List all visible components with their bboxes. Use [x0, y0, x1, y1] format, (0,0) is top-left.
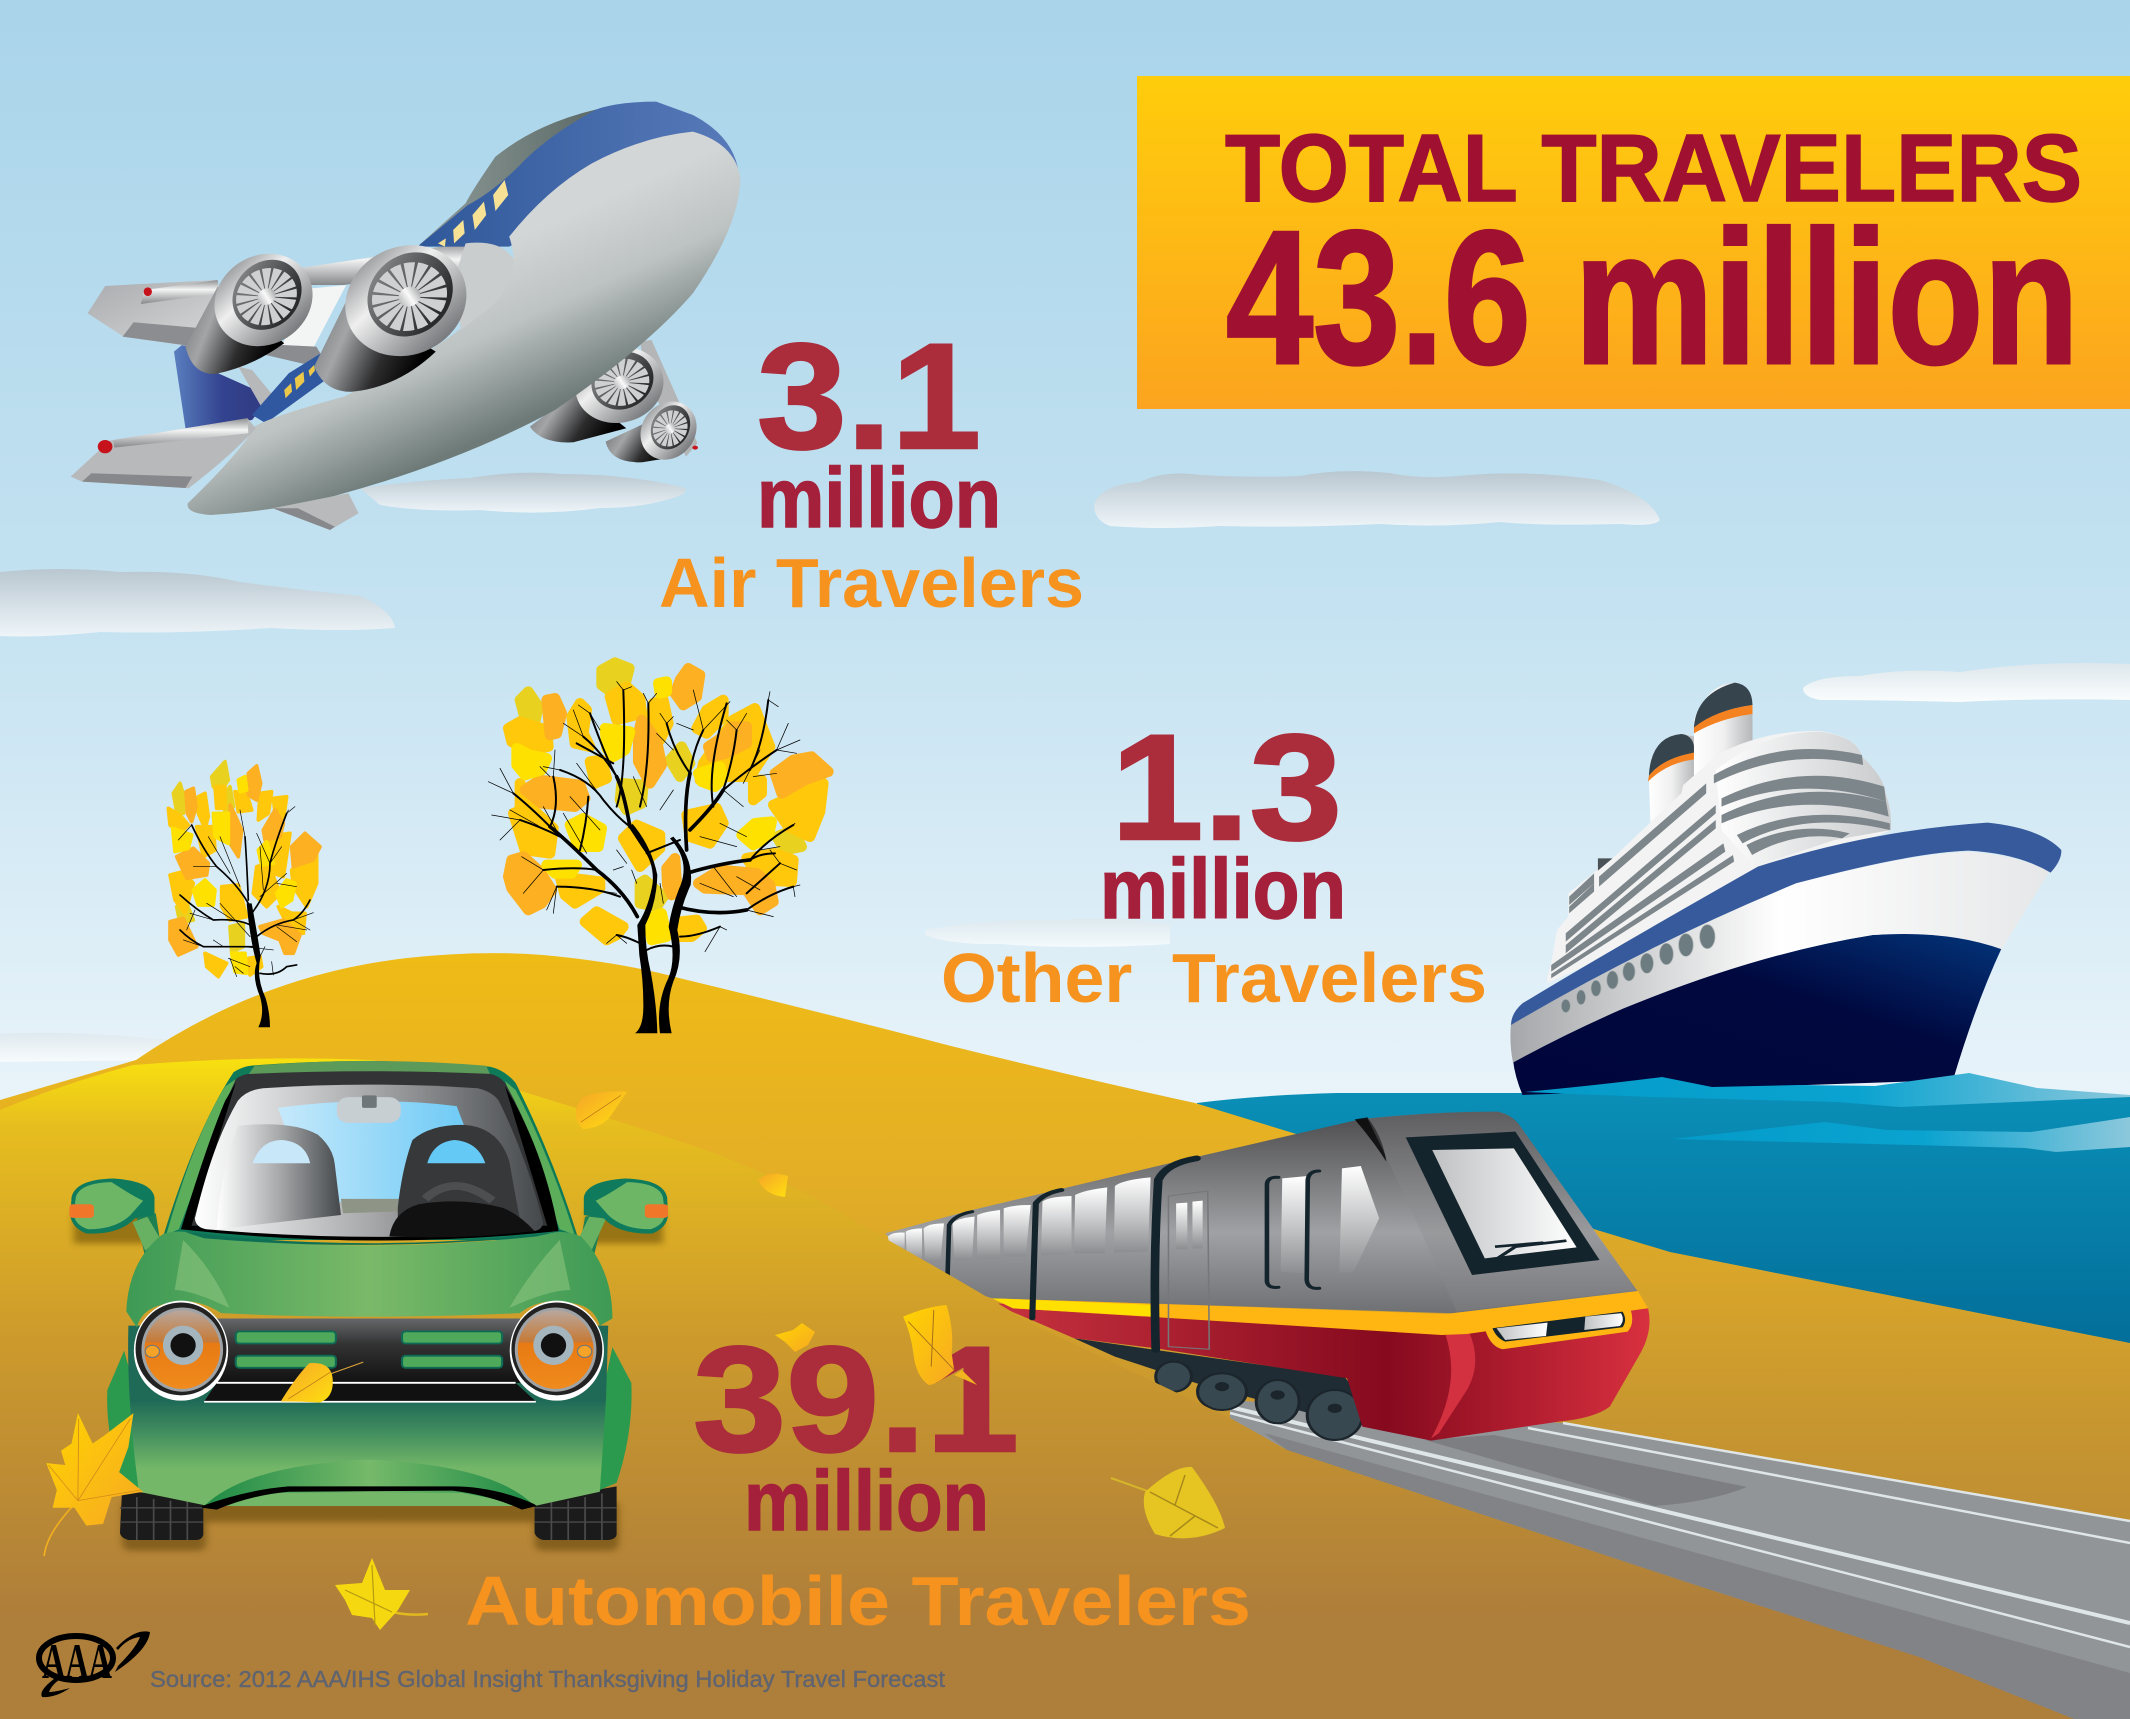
hull — [1513, 934, 2002, 1095]
water surface waves — [1525, 1073, 2130, 1152]
number: air travelers 3.1 million: million — [757, 451, 1001, 545]
trunk and branches — [247, 903, 270, 1027]
far wing and engines — [530, 340, 703, 463]
leaves — [44, 1091, 1225, 1630]
number: automobile travelers 39.1 million: million — [744, 1454, 989, 1548]
icon: train — [885, 1112, 1650, 1441]
mirrors — [69, 1179, 668, 1258]
yellow stripe — [992, 1291, 1648, 1335]
number: automobile travelers 39.1 million: 39.1 — [693, 1315, 1019, 1483]
label: air travelers: Air Travelers — [659, 544, 1084, 622]
foliage — [508, 663, 828, 940]
tyres — [120, 1486, 617, 1540]
under chassis and wheels — [1074, 1338, 1362, 1440]
upper wing — [88, 243, 468, 370]
red lower body — [992, 1303, 1650, 1441]
seats — [217, 1124, 341, 1229]
logo: AAA: AAA — [42, 1633, 112, 1689]
blue rail — [1511, 823, 2061, 1025]
number: air travelers 3.1 million — [659, 312, 1084, 622]
railway track — [1230, 1400, 2130, 1719]
panel: total travelers banner — [1137, 76, 2130, 409]
windscreen — [1406, 1132, 1600, 1275]
door frames and joints — [948, 1158, 1319, 1350]
body and hood — [107, 1231, 632, 1510]
label: automobile travelers: Automobile Travelers — [465, 1562, 1251, 1640]
blue stripe with windows — [252, 102, 739, 423]
dark roof — [417, 109, 596, 247]
portholes — [1561, 925, 1715, 1013]
front hill — [0, 1058, 2074, 1719]
icon: maple leaf by label — [335, 1558, 428, 1630]
number: other travelers 1.3 million: million — [1100, 842, 1346, 936]
fuselage — [188, 132, 740, 515]
icon: small leaf on hill — [758, 1174, 788, 1197]
wing root fairing — [454, 243, 514, 330]
icon: maple leaf left of car — [44, 1413, 143, 1556]
heading: total travelers: TOTAL TRAVELERS — [1225, 115, 2082, 222]
superstructure — [1547, 731, 1891, 983]
icon: cruise ship — [1510, 683, 2061, 1095]
small tree — [168, 762, 320, 1027]
headlights — [1485, 1308, 1632, 1349]
grille — [204, 1319, 536, 1402]
icon: leaf over 39.1 — [903, 1305, 977, 1385]
water — [1197, 1093, 2130, 1350]
headlamps — [134, 1301, 604, 1401]
icon: small maple near number — [775, 1323, 815, 1352]
grey upper body — [885, 1112, 1638, 1313]
cabin — [162, 1061, 579, 1240]
white band — [1510, 852, 2049, 1063]
icon: leaf on hill — [576, 1091, 627, 1129]
large tree — [488, 663, 828, 1033]
foliage — [168, 762, 320, 977]
number: air travelers 3.1 million: 3.1 — [757, 312, 981, 480]
near engines — [185, 237, 480, 392]
lower stabilizer — [71, 418, 359, 530]
icon: airplane — [71, 102, 740, 530]
side windows — [888, 1166, 1379, 1273]
number: other travelers 1.3 million: 1.3 — [1111, 703, 1342, 871]
shadow — [74, 1211, 663, 1551]
funnels — [1648, 683, 1752, 830]
back hill — [0, 953, 2130, 1719]
number: other travelers 1.3 million — [941, 703, 1487, 1017]
number: automobile travelers 39.1 million — [465, 1315, 1251, 1640]
source note: Source: 2012 AAA/IHS Global Insight Thanksgiving Holiday Travel Forecast — [150, 1666, 946, 1692]
icon: leaf on ground — [1111, 1467, 1225, 1538]
clouds — [0, 471, 2130, 1062]
label: other travelers: Other Travelers — [941, 939, 1487, 1017]
windshield — [195, 1085, 543, 1237]
icon: leaf on grille — [281, 1362, 363, 1402]
icon: green car — [69, 1061, 668, 1551]
trunks and branches — [628, 824, 691, 1033]
